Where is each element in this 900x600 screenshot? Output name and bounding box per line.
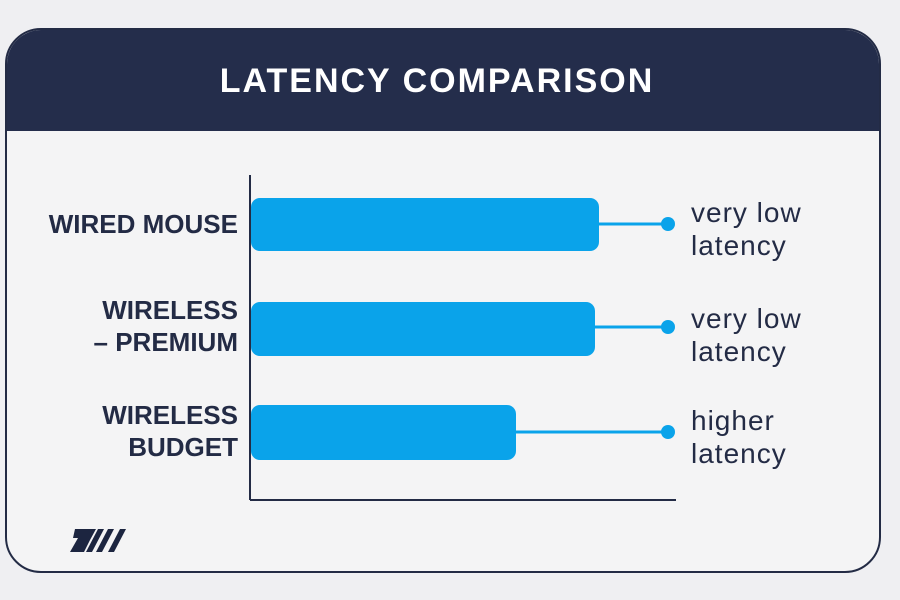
value: budget: latency (691, 438, 787, 469)
icon: logo (70, 529, 126, 552)
bar: wireless premium (251, 302, 675, 356)
value: premium (691, 303, 802, 367)
label: wired mouse: WIRED MOUSE (49, 209, 238, 239)
label: wireless budget (102, 400, 238, 462)
label: wireless premium: – PREMIUM (94, 327, 238, 357)
label: wireless budget: BUDGET (128, 432, 238, 462)
label: wireless premium (94, 295, 238, 357)
value: wired: latency (691, 230, 787, 261)
bar: wireless budget (251, 405, 675, 460)
label: wireless premium: WIRELESS (102, 295, 238, 325)
bar: wired (251, 198, 675, 251)
value: premium: latency (691, 336, 787, 367)
value: budget: higher (691, 405, 775, 436)
value: budget (691, 405, 787, 469)
title: LATENCY COMPARISON (220, 62, 654, 100)
value: wired (691, 197, 802, 261)
value: premium: very low (691, 303, 802, 334)
header bar (7, 30, 879, 131)
value: wired: very low (691, 197, 802, 228)
label: wireless budget: WIRELESS (102, 400, 238, 430)
